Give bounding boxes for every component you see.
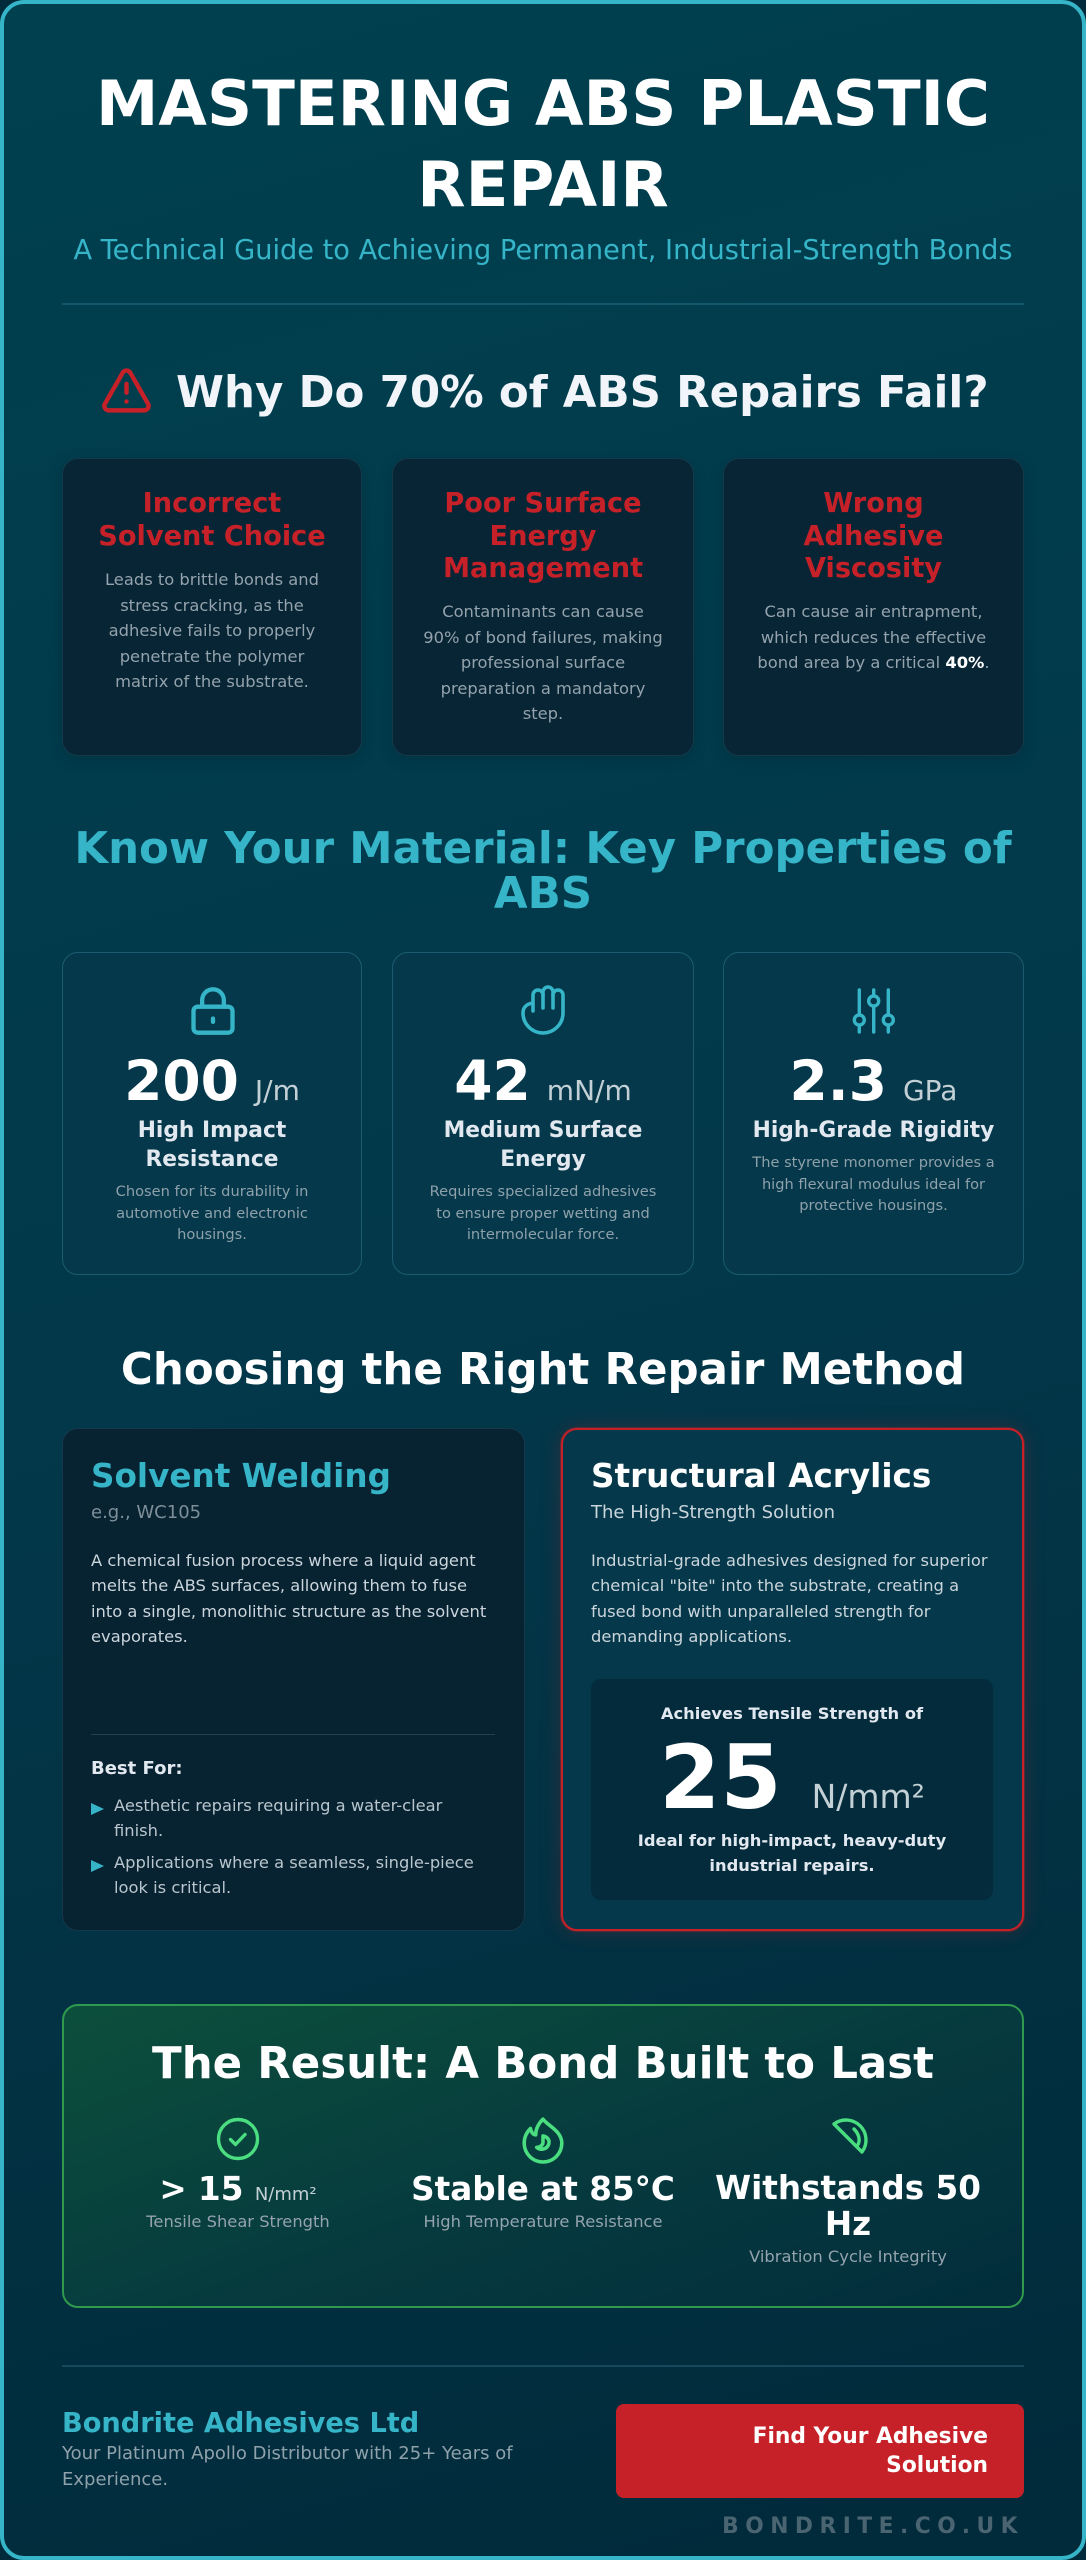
stat description: housings.: [177, 1226, 247, 1243]
stat label: Tensile Shear Strength: [146, 2212, 330, 2231]
stat label: Resistance: [145, 1147, 279, 1172]
panel: incorrect solvent choice: [62, 458, 362, 756]
card text: professional surface: [461, 653, 625, 672]
card heading: Adhesive: [804, 520, 943, 552]
card heading: [98, 488, 326, 552]
stat: 200 J/m: 200 J/m: [124, 1049, 300, 1113]
card text: [757, 602, 990, 672]
stat description: to ensure proper wetting and: [436, 1205, 650, 1222]
item text: Aesthetic repairs requiring a water-clear: [114, 1796, 442, 1815]
card text: which reduces the effective: [761, 628, 986, 647]
card heading: Management: [443, 553, 643, 584]
card heading: Incorrect: [143, 488, 281, 519]
icon: lock: [191, 987, 235, 1035]
callout note: Ideal for high-impact, heavy-duty: [638, 1831, 946, 1850]
panel description: chemical "bite" into the substrate, creating a: [591, 1576, 959, 1595]
stat: 25 N/mm²: 25 N/mm²: [659, 1726, 925, 1829]
stat label: High-Grade Rigidity: [753, 1118, 994, 1143]
panel description: melts the ABS surfaces, allowing them to fuse: [91, 1576, 467, 1595]
stat: vibration integrity: [715, 2118, 981, 2266]
stat description: high flexural modulus ideal for: [762, 1176, 985, 1193]
panel description: A chemical fusion process where a liquid agent: [91, 1551, 476, 1570]
list item: [91, 1796, 442, 1840]
call to action button: Find Your Adhesive: [753, 2424, 988, 2449]
card text: Can cause air entrapment,: [764, 602, 983, 621]
callout: tensile strength: [591, 1679, 993, 1900]
card heading: Solvent Choice: [98, 520, 326, 552]
icon: arrow bullet: [91, 1860, 104, 1872]
stat value: > 15 N/mm²: [159, 2170, 317, 2208]
title: REPAIR: [417, 148, 669, 221]
panel: impact resistance: [62, 952, 362, 1275]
call to action button: [616, 2404, 1024, 2498]
card text: bond area by a critical 40%.: [757, 653, 990, 672]
card text: step.: [523, 704, 563, 723]
stat label: High Temperature Resistance: [423, 2212, 663, 2231]
icon: check circle: [216, 2118, 260, 2160]
best for heading: Best For:: [91, 1758, 183, 1779]
list item: [91, 1853, 474, 1897]
stat label: Energy: [500, 1147, 586, 1172]
card text: penetrate the polymer: [120, 647, 304, 666]
panel: wrong adhesive viscosity: [723, 458, 1024, 756]
icon: half leaf: [832, 2118, 868, 2154]
title: MASTERING ABS PLASTIC: [96, 67, 990, 140]
card text: [105, 570, 319, 691]
stat value: Stable at 85°C: [411, 2170, 675, 2208]
card heading: [443, 488, 643, 584]
stat description: The styrene monomer provides a: [752, 1154, 995, 1171]
card text: Leads to brittle bonds and: [105, 570, 319, 589]
panel description: demanding applications.: [591, 1627, 792, 1646]
item text: Applications where a seamless, single-piece: [114, 1853, 474, 1872]
stat label: [138, 1118, 286, 1172]
panel: the result: [62, 2004, 1024, 2308]
stat: 2.3 GPa: 2.3 GPa: [790, 1049, 957, 1113]
heading: choosing the right repair method: Choosing the Right Repair Method: [121, 1345, 965, 1395]
panel: rigidity: [723, 952, 1024, 1275]
card text: 90% of bond failures, making: [423, 628, 663, 647]
stat: temperature resistance: [411, 2117, 675, 2231]
stat: tensile shear strength: [146, 2118, 330, 2231]
panel subtitle: The High-Strength Solution: [591, 1502, 835, 1523]
panel subtitle: e.g., WC105: [91, 1502, 201, 1523]
stat label: Medium Surface: [444, 1118, 642, 1143]
card heading: [804, 488, 943, 584]
heading: know your material: [74, 824, 1012, 919]
card text: adhesive fails to properly: [109, 621, 315, 640]
card heading: Energy: [490, 520, 596, 552]
stat label: High Impact: [138, 1118, 286, 1143]
card text: stress cracking, as the: [120, 596, 304, 615]
footer: company info: [62, 2408, 513, 2490]
stat description: Chosen for its durability in: [116, 1183, 308, 1200]
card heading: Viscosity: [805, 553, 942, 584]
stat description: intermolecular force.: [467, 1226, 619, 1243]
panel heading: The Result: A Bond Built to Last: [152, 2039, 934, 2089]
card text: [423, 602, 663, 723]
item text: [114, 1796, 442, 1840]
panel: poor surface energy management: [392, 458, 694, 756]
heading: why repairs fail: Why Do 70% of ABS Repairs Fail?: [176, 368, 989, 418]
panel title: Structural Acrylics: [591, 1457, 931, 1495]
subtitle: A Technical Guide to Achieving Permanent, Industrial-Strength Bonds: [73, 235, 1013, 266]
stat value: [715, 2169, 981, 2243]
icon: flame: [522, 2117, 564, 2164]
stat value: Hz: [825, 2205, 871, 2243]
panel description: Industrial-grade adhesives designed for superior: [591, 1551, 988, 1570]
stat description: [430, 1183, 656, 1243]
card text: matrix of the substrate.: [115, 672, 309, 691]
icon: warning triangle: [102, 368, 151, 413]
heading: know your material: Know Your Material: Key Properties of: [74, 824, 1012, 874]
card text: preparation a mandatory: [441, 679, 645, 698]
stat value: Withstands 50: [715, 2169, 981, 2207]
company description: Your Platinum Apollo Distributor with 25+ Years of: [62, 2443, 513, 2464]
heading: know your material: ABS: [494, 869, 592, 919]
panel description: [91, 1551, 486, 1646]
stat description: Requires specialized adhesives: [430, 1183, 656, 1200]
website watermark: BONDRITE.CO.UK: [722, 2514, 1024, 2539]
icon: hand: [521, 985, 565, 1035]
company description: [62, 2443, 513, 2490]
panel description: into a single, monolithic structure as the solvent: [91, 1602, 486, 1621]
icon: sliders: [852, 988, 895, 1034]
panel description: evaporates.: [91, 1627, 188, 1646]
panel: surface energy: [392, 952, 694, 1275]
card text: Contaminants can cause: [442, 602, 644, 621]
stat: 42 mN/m: 42 mN/m: [454, 1049, 632, 1113]
callout note: industrial repairs.: [709, 1856, 875, 1875]
callout note: [638, 1831, 946, 1875]
icon: arrow bullet: [91, 1803, 104, 1815]
card heading: Wrong: [823, 488, 924, 519]
stat description: [116, 1183, 308, 1243]
callout label: Achieves Tensile Strength of: [661, 1704, 923, 1723]
panel title: Solvent Welding: [91, 1457, 391, 1495]
item text: finish.: [114, 1821, 163, 1840]
stat description: automotive and electronic: [116, 1205, 308, 1222]
panel: solvent welding: [62, 1428, 525, 1931]
stat label: Vibration Cycle Integrity: [749, 2247, 947, 2266]
card heading: Poor Surface: [444, 488, 642, 519]
stat description: protective housings.: [799, 1197, 948, 1214]
panel description: [591, 1551, 988, 1646]
stat label: [444, 1118, 642, 1172]
call to action button: Solution: [886, 2453, 988, 2478]
company name: Bondrite Adhesives Ltd: [62, 2408, 419, 2439]
stat description: [752, 1154, 995, 1214]
item text: [114, 1853, 474, 1897]
company description: Experience.: [62, 2469, 168, 2490]
title: [96, 67, 990, 221]
panel description: fused bond with unparalleled strength for: [591, 1602, 930, 1621]
item text: look is critical.: [114, 1878, 231, 1897]
panel: structural acrylics: [561, 1428, 1024, 1931]
